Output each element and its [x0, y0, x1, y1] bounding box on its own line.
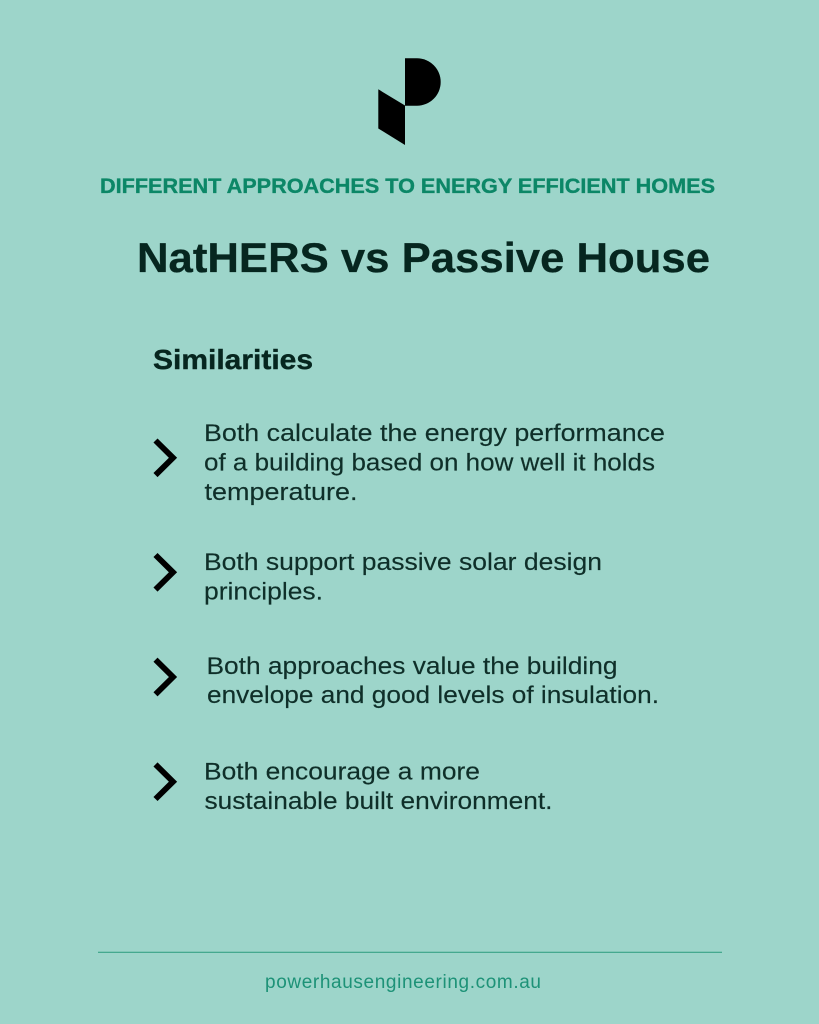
text: item 4: Both encourage a more	[204, 758, 480, 786]
text: item 1: of a building based on how well it holds	[204, 450, 655, 476]
text: item 1: temperature.	[204, 479, 358, 506]
text: item 1	[204, 420, 665, 506]
text: item 2: Both support passive solar design	[204, 549, 602, 576]
text: item 2	[204, 549, 602, 606]
icon: Powerhaus logo	[378, 58, 441, 145]
text: item 1: Both calculate the energy performance	[204, 420, 665, 447]
footer website: powerhausengineering.com.au	[265, 972, 541, 993]
icon: chevron 3	[156, 660, 173, 694]
list item 3	[156, 653, 659, 709]
list item 4	[156, 758, 552, 815]
text: item 3	[206, 653, 659, 709]
eyebrow heading: DIFFERENT APPROACHES TO ENERGY EFFICIENT HOMES	[100, 173, 715, 198]
list item 1	[156, 420, 665, 506]
text: item 3: Both approaches value the building	[206, 653, 618, 680]
icon: chevron 1	[156, 440, 173, 475]
section heading: similarities: Similarities	[153, 344, 313, 375]
list item 2	[156, 549, 602, 606]
text: item 3: envelope and good levels of insulation.	[207, 682, 659, 709]
text: item 4: sustainable built environment.	[204, 788, 552, 815]
title: NatHERS vs Passive House	[137, 234, 710, 281]
text: item 4	[204, 758, 552, 815]
text: item 2: principles.	[204, 578, 323, 606]
icon: chevron 2	[156, 555, 173, 590]
icon: chevron 4	[156, 764, 173, 799]
